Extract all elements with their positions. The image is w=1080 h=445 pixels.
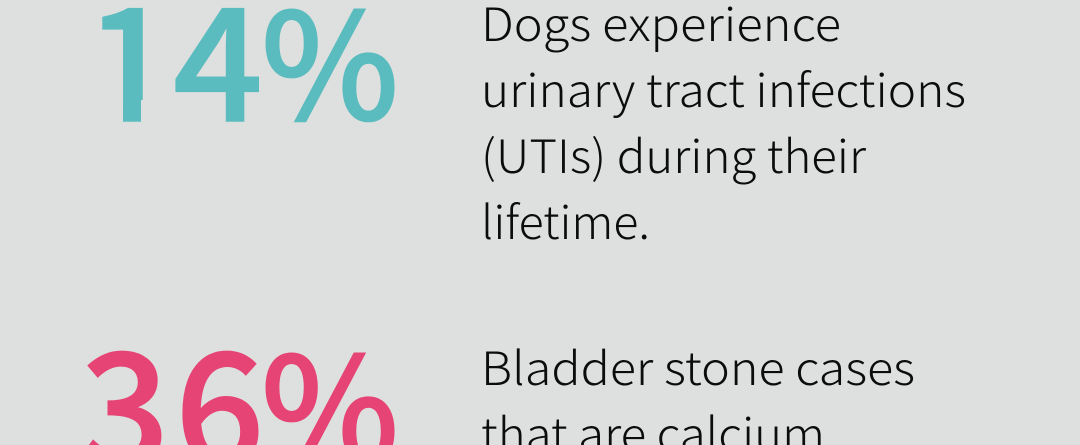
text block: UTI description: lifetime. — [481, 187, 650, 253]
statistic: 14% — [84, 0, 399, 167]
text block: UTI description: urinary tract infections — [481, 55, 966, 121]
text block: bladder stone description: Bladder stone cases — [481, 333, 915, 399]
text block: UTI description: (UTIs) during their — [481, 121, 866, 187]
statistic: 36% — [80, 285, 399, 445]
text block: UTI description — [481, 0, 966, 253]
text block: bladder stone description — [481, 333, 915, 445]
